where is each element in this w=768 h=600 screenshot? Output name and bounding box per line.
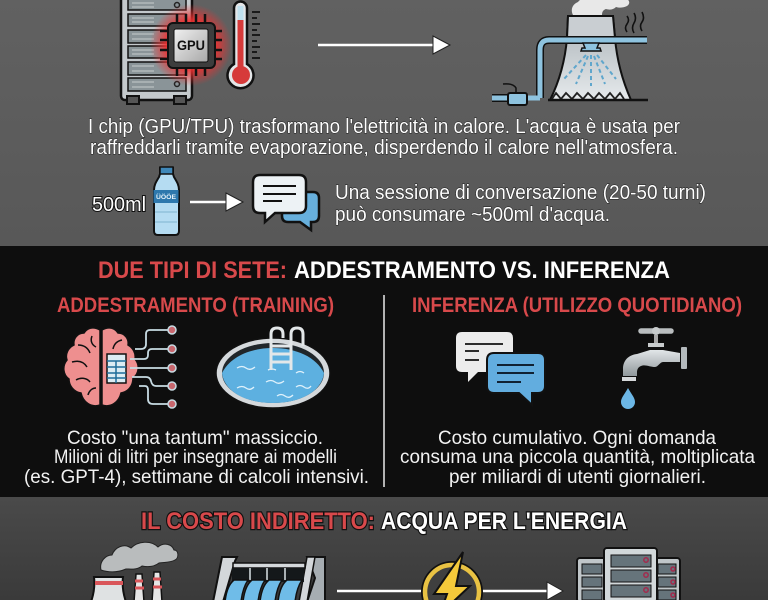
icon: GPU chip with red glow: GPU: [177, 37, 205, 53]
panel: two types of thirst: [0, 246, 768, 497]
heading: water for energy: IL COSTO INDIRETTO:: [141, 508, 375, 535]
text block: explanation: raffreddarli tramite evaporazione, disperdendo il calore nell'atmosfera.: [90, 137, 678, 159]
heading: training vs inference: ADDESTRAMENTO VS. INFERENZA: [294, 257, 670, 284]
text block: training cost: (es. GPT-4), settimane di calcoli intensivi.: [24, 466, 369, 488]
icon: dark chat bubbles: [456, 332, 545, 405]
text block: session consumption: può consumare ~500ml d'acqua.: [335, 204, 610, 226]
icon: GPU chip with red glow: [150, 4, 232, 86]
arrow: bottle to chat: [190, 193, 243, 211]
text block: inference cost: consuma una piccola quantità, moltiplicata: [400, 446, 755, 468]
column: inference: [400, 294, 755, 488]
icon: thermometer: [228, 2, 260, 88]
text block: session consumption: Una sessione di conversazione (20-50 turni): [335, 182, 706, 204]
text block: explanation: [88, 116, 680, 159]
text block: training cost: Costo "una tantum" massiccio.: [67, 427, 323, 449]
icon: hydroelectric dam: [213, 557, 325, 600]
icon: lightning bolt: [421, 552, 483, 600]
text block: training cost: [24, 427, 369, 488]
text block: inference cost: [400, 427, 755, 488]
icon: data centre servers: [577, 548, 680, 600]
icon: cooling tower: [492, 0, 648, 105]
icon: power plant: [91, 542, 178, 600]
text block: inference cost: Costo cumulativo. Ogni domanda: [438, 427, 716, 449]
icon: brain with circuits: [64, 326, 176, 408]
label: 500ml: 500ml: [92, 194, 146, 216]
icon: dripping tap: [621, 327, 687, 409]
heading: water for energy: ACQUA PER L'ENERGIA: [381, 508, 627, 535]
panel: chip cooling and session water: [0, 0, 768, 246]
icon: server rack: [121, 0, 192, 104]
column: training: ADDESTRAMENTO (TRAINING): [57, 294, 334, 317]
column: training: [24, 294, 369, 488]
icon: chat bubbles: [253, 175, 319, 230]
text block: inference cost: per miliardi di utenti giornalieri.: [449, 466, 706, 488]
icon: water bottle: ÜÖÖE: [156, 192, 177, 201]
heading: training vs inference: DUE TIPI DI SETE:: [98, 257, 287, 284]
icon: swimming pool: [216, 328, 330, 408]
text block: explanation: I chip (GPU/TPU) trasformano l'elettricità in calore. L'acqua è usata per: [88, 116, 680, 138]
text block: session consumption: [335, 182, 706, 226]
panel: indirect cost: [0, 497, 768, 600]
icon: water bottle: [154, 167, 179, 235]
arrow: energy to data centre: [337, 582, 563, 600]
text block: training cost: Milioni di litri per insegnare ai modelli: [54, 446, 337, 468]
arrow: chip to cooling tower: [318, 36, 450, 54]
